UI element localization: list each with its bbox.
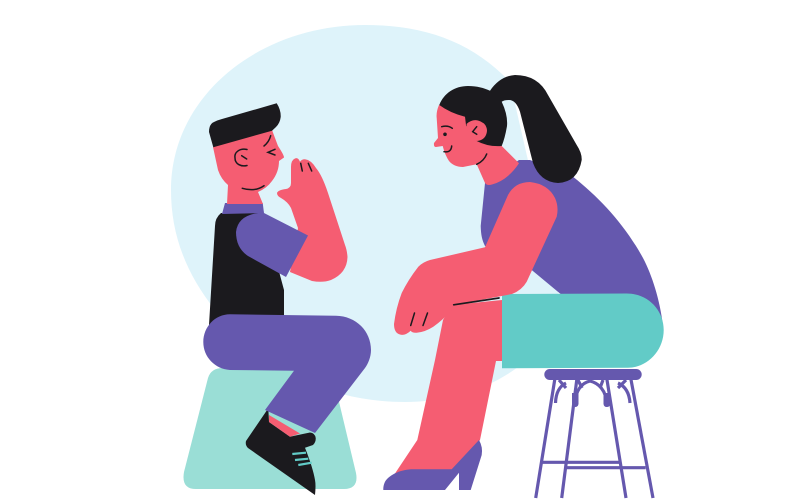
- boy shoe: [246, 408, 316, 495]
- boy: [203, 103, 371, 495]
- boy face lines: [235, 136, 275, 190]
- woman hair and ponytail: [439, 75, 582, 183]
- woman arm and hand: [394, 182, 558, 335]
- woman shoe: [383, 440, 482, 490]
- woman face lines: [442, 126, 487, 164]
- woman eye: [443, 132, 447, 136]
- woman neck and face: [434, 100, 519, 185]
- boy finger lines: [301, 163, 312, 171]
- woman thigh: [502, 294, 664, 368]
- boy sleeve: [236, 212, 308, 277]
- stool legs: [536, 378, 653, 498]
- boy head and neck: [213, 130, 284, 204]
- boy hair: [209, 103, 281, 147]
- boy collar: [222, 203, 264, 214]
- stool: [536, 369, 653, 498]
- background blob: [171, 25, 560, 402]
- woman front leg: [394, 300, 502, 475]
- arm crease and finger lines: [411, 298, 499, 326]
- boy forearm and hands: [277, 158, 348, 282]
- woman: [383, 75, 664, 490]
- stool arch feet: [572, 393, 610, 407]
- boy legs: [203, 314, 371, 433]
- shoe laces: [292, 453, 312, 465]
- boy sock: [269, 415, 300, 437]
- woman ear: [466, 120, 487, 141]
- boy's stool: [184, 368, 356, 489]
- stool seat: [544, 369, 642, 380]
- woman torso: [481, 160, 663, 330]
- boy torso: [209, 212, 284, 325]
